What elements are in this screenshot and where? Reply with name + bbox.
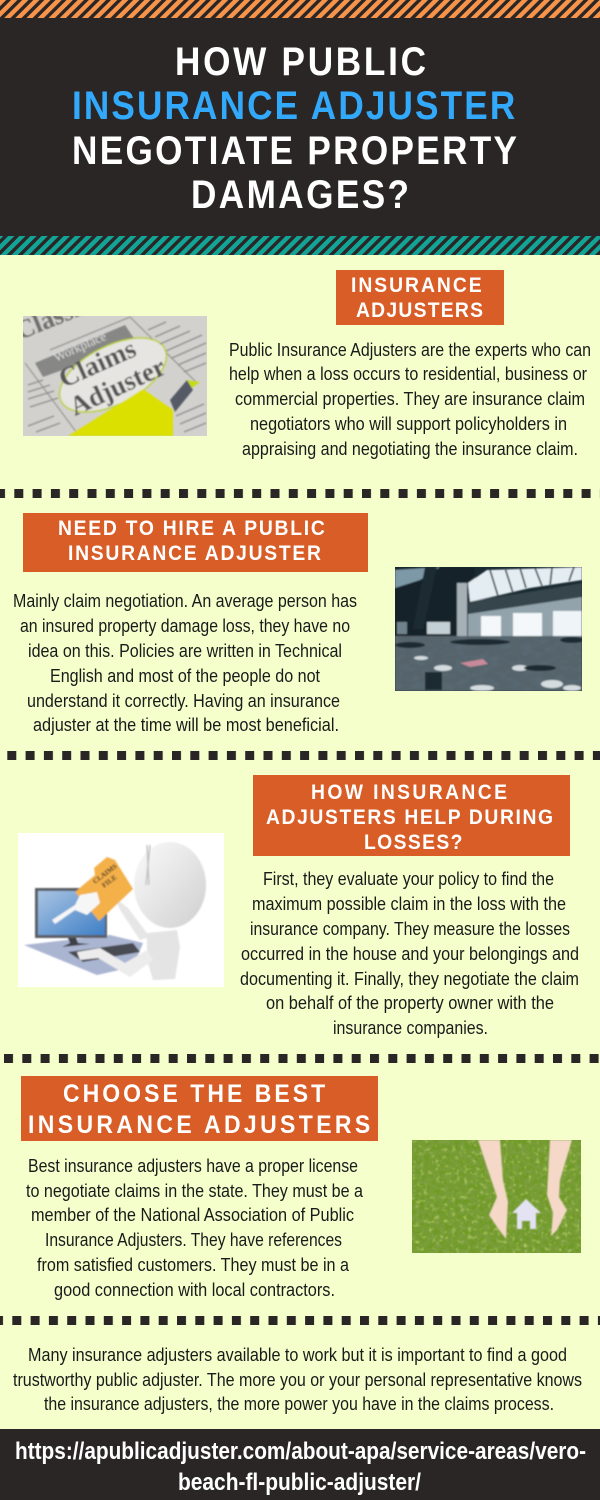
paragraph: why hire: understand it correctly. Having an insurance xyxy=(27,691,340,711)
title: INSURANCE ADJUSTER xyxy=(72,83,515,127)
paragraph: choosing criteria: Insurance Adjusters. They have references xyxy=(45,1230,342,1250)
header banner xyxy=(0,0,600,255)
paragraph: how they help xyxy=(240,869,579,1038)
footer url bar xyxy=(0,1429,600,1500)
paragraph: how they help: on behalf of the property owner with the xyxy=(266,993,554,1013)
title: DAMAGES? xyxy=(191,172,409,216)
heading: need to hire: NEED TO HIRE A PUBLIC xyxy=(58,517,325,540)
heading: insurance adjusters xyxy=(336,270,504,325)
heading: choose the best: CHOOSE THE BEST xyxy=(63,1080,326,1108)
paragraph: how they help: maximum possible claim in the loss with the xyxy=(252,894,566,914)
paragraph: why hire: adjuster at the time will be most beneficial. xyxy=(33,715,339,735)
heading: insurance adjusters: INSURANCE xyxy=(351,274,482,297)
paragraph: choosing criteria: good connection with local contractors. xyxy=(54,1280,335,1300)
heading: insurance adjusters: ADJUSTERS xyxy=(356,299,483,322)
image: figure handing claims file from computer: CLAIMS xyxy=(91,862,119,886)
heading: choose the best: INSURANCE ADJUSTERS xyxy=(28,1111,370,1139)
paragraph: why hire: English and most of the people do not xyxy=(50,666,320,686)
paragraph: choosing criteria xyxy=(26,1156,364,1300)
image: newspaper claims adjuster: Adjuster xyxy=(65,351,170,421)
image: damaged building xyxy=(395,567,582,691)
title: NEGOTIATE PROPERTY xyxy=(72,128,517,172)
image: newspaper claims adjuster: Workplace xyxy=(51,328,109,365)
paragraph: choosing criteria: Best insurance adjusters have a proper license xyxy=(28,1156,358,1176)
heading: how adjusters help: ADJUSTERS HELP DURING xyxy=(266,806,553,829)
heading: how adjusters help: HOW INSURANCE xyxy=(311,781,507,804)
image: newspaper claims adjuster: Classifi xyxy=(11,288,99,346)
paragraph: why hire: an insured property damage loss, they have no xyxy=(20,616,350,636)
divider 4 xyxy=(0,1316,600,1325)
paragraph: how they help: insurance companies. xyxy=(333,1018,488,1038)
heading: need to hire: INSURANCE ADJUSTER xyxy=(68,542,321,565)
paragraph: why hire: idea on this. Policies are written in Technical xyxy=(28,641,342,661)
image: newspaper claims adjuster: Claims xyxy=(54,333,140,393)
paragraph: choosing criteria: from satisfied customers. They must be in a xyxy=(37,1255,350,1275)
paragraph: who adjusters are xyxy=(229,340,591,459)
image: figure handing claims file from computer xyxy=(18,833,224,987)
heading: choose the best xyxy=(21,1076,378,1141)
title: HOW PUBLIC xyxy=(175,39,426,83)
paragraph: why hire: Mainly claim negotiation. An average person has xyxy=(13,591,357,611)
image: hands around paper house on grass xyxy=(412,1140,581,1253)
paragraph: why hire xyxy=(13,591,357,735)
footer url bar: beach-fl-public-adjuster/ xyxy=(178,1469,421,1496)
image: newspaper claims adjuster xyxy=(11,288,207,436)
heading: how adjusters help xyxy=(253,775,570,856)
paragraph: who adjusters are: negotiators who will support policyholders in xyxy=(250,414,567,434)
paragraph: choosing criteria: member of the National Association of Public xyxy=(31,1205,354,1225)
title xyxy=(72,39,517,216)
paragraph: closing xyxy=(13,1345,582,1414)
heading: need to hire xyxy=(23,513,368,572)
image: figure handing claims file from computer: FILE xyxy=(100,873,119,890)
divider 2 xyxy=(7,751,600,760)
divider 3 xyxy=(4,1054,600,1063)
divider 1 xyxy=(0,489,600,498)
paragraph: how they help: First, they evaluate your policy to find the xyxy=(263,869,554,889)
heading: how adjusters help: LOSSES? xyxy=(364,831,462,854)
paragraph: choosing criteria: to negotiate claims in the state. They must be a xyxy=(26,1181,364,1201)
